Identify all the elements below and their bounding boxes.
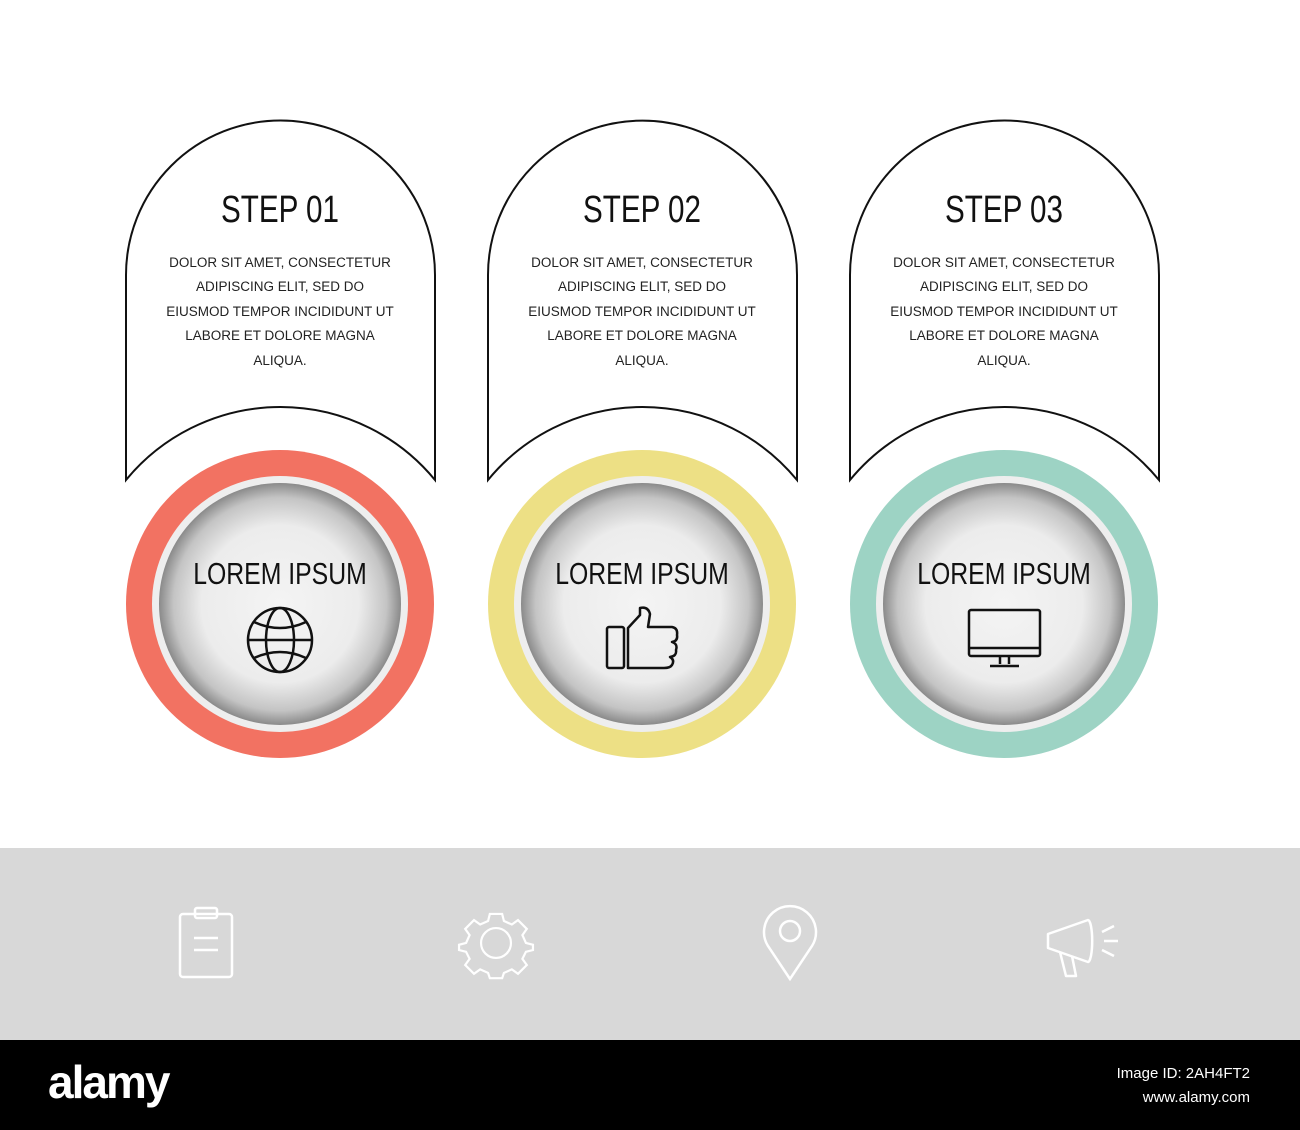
icon: globe [248,608,312,672]
text block 3: LABORE ET DOLORE MAGNA [909,328,1099,343]
text block 2: DOLOR SIT AMET, CONSECTETUR [531,255,753,270]
circle 1: LOREM IPSUM [193,556,367,591]
text block 3 [890,255,1118,368]
icon: clipboard [180,908,232,977]
text block 1: ADIPISCING ELIT, SED DO [196,279,364,294]
icon: location pin [764,906,816,979]
heading: STEP 02: STEP 02 [583,189,701,231]
text block 2: ALIQUA. [615,353,669,368]
icon: thumbs up [607,608,677,668]
panel: step 03 [850,121,1159,758]
arch card 2 [488,121,797,480]
text block 2: ADIPISCING ELIT, SED DO [558,279,726,294]
text block 3: EIUSMOD TEMPOR INCIDIDUNT UT [890,304,1118,319]
text block 3: DOLOR SIT AMET, CONSECTETUR [893,255,1115,270]
icon: megaphone [1048,920,1118,976]
circle 3: LOREM IPSUM [917,556,1091,591]
footer logo: alamy [48,1056,171,1108]
text block 2 [528,255,756,368]
text block 1: DOLOR SIT AMET, CONSECTETUR [169,255,391,270]
text block 2: LABORE ET DOLORE MAGNA [547,328,737,343]
icon: gear [459,914,533,978]
footer bar: www.alamy.com [1142,1089,1250,1106]
arch card 3 [850,121,1159,480]
heading: STEP 01: STEP 01 [221,189,339,231]
footer bar [0,1040,1300,1130]
text block 3: ALIQUA. [977,353,1031,368]
footer caption: Image ID: 2AH4FT2 [1117,1065,1250,1082]
icon: monitor [969,610,1040,666]
circle 1 [126,450,434,758]
text block 1: LABORE ET DOLORE MAGNA [185,328,375,343]
gray band with icons [0,848,1300,1040]
heading: STEP 03: STEP 03 [945,189,1063,231]
text block 2: EIUSMOD TEMPOR INCIDIDUNT UT [528,304,756,319]
panel: step 01 [126,121,435,758]
circle 2 [488,450,796,758]
circle 2: LOREM IPSUM [555,556,729,591]
circle 3 [850,450,1158,758]
panel: step 02 [488,121,797,758]
arch card 1 [126,121,435,480]
text block 1 [166,255,394,368]
text block 3: ADIPISCING ELIT, SED DO [920,279,1088,294]
text block 1: EIUSMOD TEMPOR INCIDIDUNT UT [166,304,394,319]
text block 1: ALIQUA. [253,353,307,368]
